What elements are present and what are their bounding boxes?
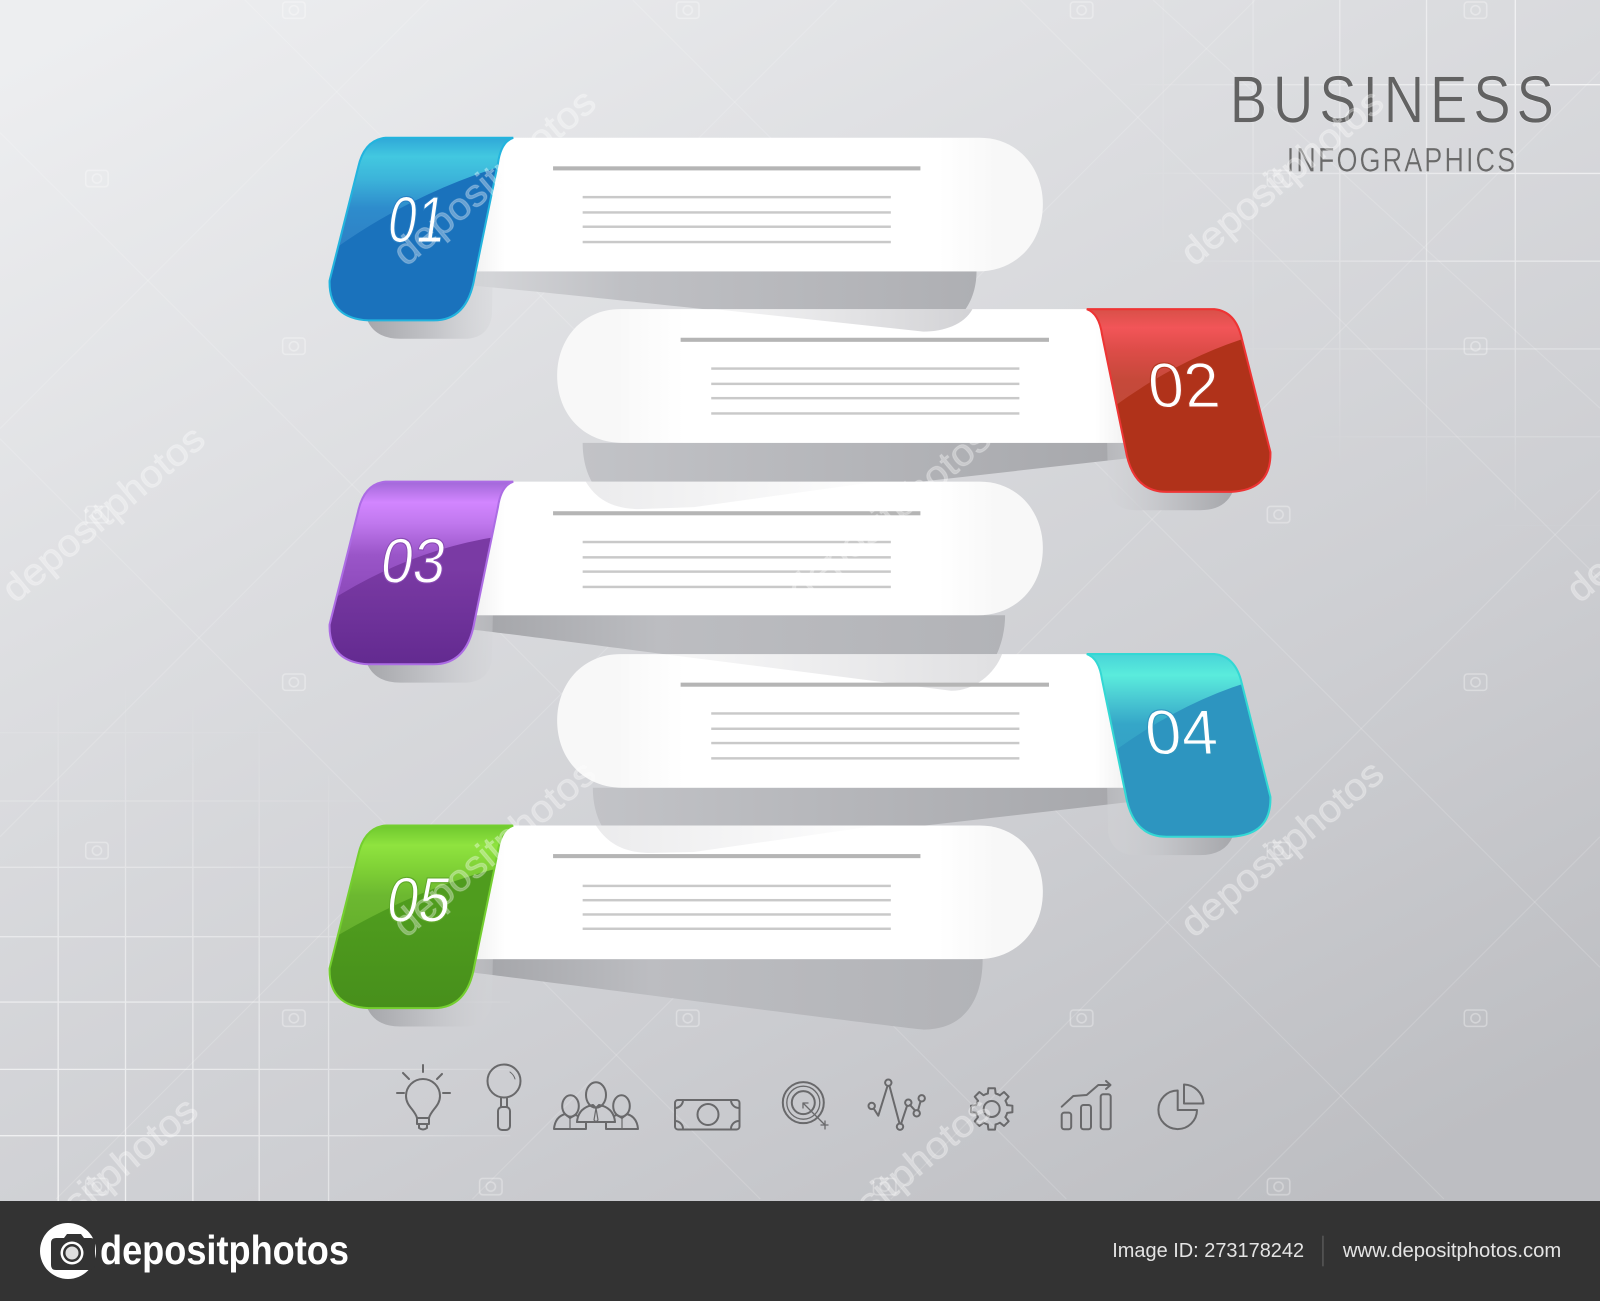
icon row: [397, 1064, 1204, 1130]
card: step 03: [464, 482, 1043, 615]
icon: light bulb: [397, 1065, 450, 1129]
card: step 04: [557, 654, 1136, 788]
tag: step 03: [328, 480, 514, 666]
shadow overlap from step 04: [596, 825, 878, 853]
title: INFOGRAPHICS: [1287, 140, 1515, 179]
shadow: step 02: [583, 443, 1133, 509]
panel: step 03: [306, 482, 1043, 691]
tag: step 04: [1086, 653, 1272, 838]
title: [1230, 63, 1554, 179]
tag: step 02: [1086, 308, 1272, 493]
tag: step 01: [328, 136, 514, 322]
panel: step 01: [306, 138, 1043, 339]
shadow overlap from step 02: [586, 482, 878, 509]
shadow: step 01: [471, 271, 977, 332]
watermarks: depositphotos: [779, 417, 998, 610]
number: 01: 01: [384, 183, 451, 256]
watermarks: depositphotos: [1172, 751, 1391, 945]
tag shadow: step 04: [1107, 788, 1233, 855]
text lines: step 02: [681, 338, 1049, 415]
icon: pie chart: [1158, 1084, 1204, 1129]
text lines: step 01: [553, 166, 920, 243]
number: 03: 03: [377, 526, 451, 597]
icon: team: [554, 1082, 638, 1129]
number: 04: 04: [1142, 698, 1221, 768]
icon: magnifier: [488, 1064, 520, 1130]
tag: step 05: [328, 824, 514, 1010]
shadow overlap from step 01: [714, 309, 972, 332]
icon: line graph: [868, 1079, 925, 1130]
icon: banknote: [675, 1100, 740, 1129]
panel: step 04: [557, 654, 1294, 855]
text lines: step 04: [681, 683, 1049, 760]
tag shadow: step 01: [367, 271, 493, 339]
panel: step 05: [306, 825, 1043, 1030]
number: 02: 02: [1145, 351, 1223, 421]
card: step 02: [557, 309, 1136, 443]
watermarks: depositphotos: [779, 1088, 998, 1282]
footer url: www.depositphotos.com: [1342, 1240, 1561, 1262]
watermarks: depositphotos: [384, 80, 604, 273]
number: 05: 05: [383, 865, 456, 935]
footer divider: [1322, 1236, 1323, 1266]
icon: target: [783, 1082, 828, 1129]
watermarks: depositphotos: [384, 751, 604, 945]
icon: bar chart with arrow: [1062, 1081, 1111, 1129]
title: BUSINESS: [1230, 63, 1554, 138]
card: step 01: [464, 138, 1043, 271]
shadow overlap from step 03: [663, 654, 1002, 691]
watermarks: depositphotos: [1172, 80, 1391, 273]
shadow: step 03: [471, 615, 1005, 691]
tag shadow: step 05: [367, 959, 493, 1027]
card: step 05: [464, 825, 1043, 959]
footer logo: [40, 1223, 349, 1279]
shadow: step 04: [593, 788, 1133, 853]
icon: gear: [971, 1088, 1012, 1130]
panel: step 02: [557, 309, 1294, 510]
shadow: step 05: [471, 959, 983, 1030]
footer bar: [0, 1201, 1600, 1301]
footer image id: Image ID: 273178242: [1112, 1240, 1304, 1262]
tag shadow: step 02: [1107, 443, 1233, 510]
tag shadow: step 03: [367, 615, 493, 683]
text lines: step 03: [553, 511, 920, 588]
footer logo: depositphotos: [100, 1227, 349, 1273]
text lines: step 05: [553, 854, 920, 930]
